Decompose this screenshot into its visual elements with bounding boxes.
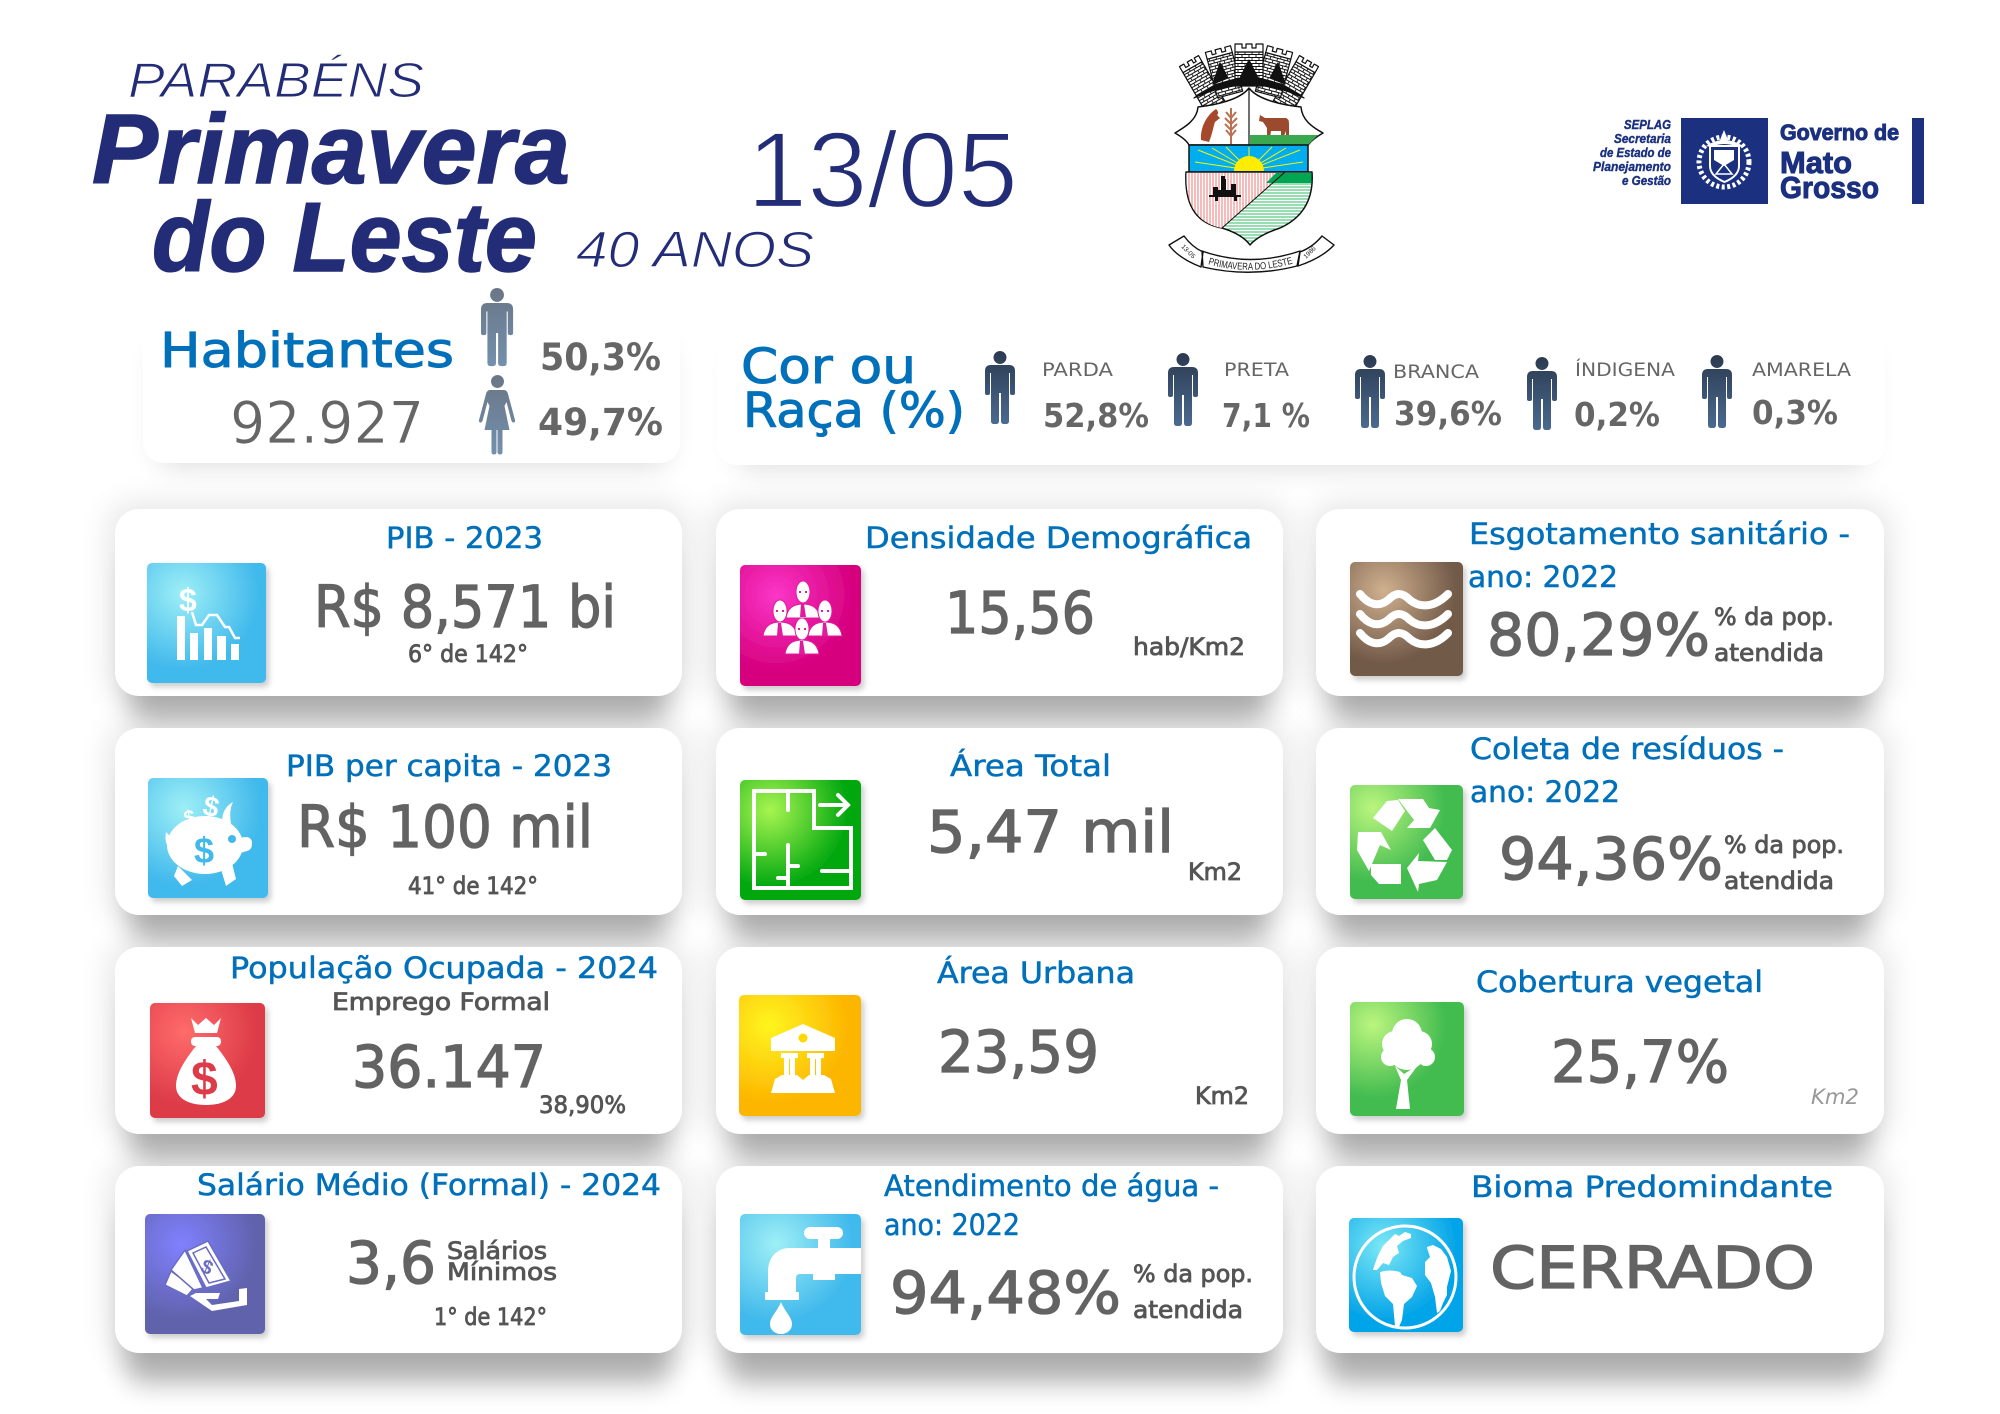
unit: atendida [1724, 867, 1834, 895]
panel: coleta de resíduos [1310, 722, 1890, 940]
icon: people [740, 565, 861, 686]
heading [884, 1169, 1219, 1242]
icon: chart: $ [179, 582, 197, 618]
group: indígena: ÍNDIGENA [1575, 358, 1675, 381]
date: 13/05 [747, 109, 1018, 230]
value: 15,56 [945, 579, 1095, 647]
logo: SEPLAG lines: SEPLAG [1624, 117, 1671, 132]
ribbon text [1207, 263, 1295, 270]
icon: piggy bank [148, 778, 268, 898]
panel: salário médio [109, 1160, 688, 1384]
ribbon tails and band [1169, 236, 1334, 272]
panel: população ocupada [109, 941, 688, 1159]
rank: 6° de 142° [408, 640, 528, 668]
icon: money bag [150, 1003, 265, 1118]
icon: piggy bank: $ [200, 790, 222, 824]
logo: SEPLAG lines: de Estado de [1600, 145, 1671, 160]
panel: PIB per capita [109, 722, 688, 940]
icon: municipal coat of arms: 1986 [1302, 245, 1318, 260]
heading: ano: 2022 [884, 1208, 1020, 1242]
panel: esgotamento sanitário [1310, 503, 1890, 721]
logo: wordmark [1780, 120, 1899, 205]
heading: Esgotamento sanitário - [1469, 517, 1850, 551]
logo: wordmark: Grosso [1780, 170, 1879, 205]
group: preta [1168, 353, 1310, 435]
heading: Salário Médio (Formal) - 2024 [197, 1168, 661, 1202]
unit: Km2 [1195, 1082, 1249, 1110]
title: do leste: do Leste [152, 182, 537, 292]
icon: chart [147, 563, 266, 683]
unit: Mínimos [447, 1258, 557, 1286]
group: branca: BRANCA [1393, 361, 1479, 383]
group: branca: 39,6% [1394, 394, 1502, 433]
value: CERRADO [1490, 1234, 1815, 1302]
panel: densidade demográfica [710, 503, 1289, 721]
crown towers [1179, 44, 1319, 116]
group: amarela: 0,3% [1752, 393, 1838, 432]
heading: Bioma Predomindante [1471, 1170, 1833, 1204]
group: indígena [1527, 357, 1675, 434]
heading: Densidade Demográfica [865, 521, 1252, 555]
icon: municipal coat of arms: 13-05 [1180, 243, 1197, 260]
panel: área urbana [710, 941, 1289, 1159]
heading: ano: 2022 [1468, 560, 1618, 594]
icon: piggy bank: $ [194, 830, 214, 871]
icon: waves [1350, 562, 1463, 676]
panel: área total [710, 722, 1289, 940]
grass [1250, 135, 1318, 145]
heading: habitantes: Habitantes [160, 323, 454, 379]
heading: cor ou raça [741, 339, 965, 439]
icon: tree [1350, 1002, 1464, 1116]
panel: cobertura vegetal [1310, 941, 1890, 1159]
unit: Km2 [1811, 1085, 1859, 1109]
unit: % da pop. [1133, 1260, 1253, 1288]
sub heading: Emprego Formal [332, 988, 550, 1016]
icon: piggy bank: $ [182, 806, 197, 830]
heading: População Ocupada - 2024 [230, 951, 658, 985]
group: amarela: AMARELA [1752, 359, 1851, 381]
unit [447, 1237, 557, 1286]
value: 23,59 [938, 1018, 1099, 1086]
unit: atendida [1714, 639, 1824, 667]
heading: Cobertura vegetal [1476, 965, 1763, 999]
icon: cash in hand: $ [197, 1256, 216, 1280]
panel: PIB 2023 [109, 503, 688, 721]
logo: SEPLAG lines: Planejamento [1593, 159, 1671, 174]
rank: 41° de 142° [408, 872, 538, 900]
icon: water tap [740, 1214, 861, 1335]
icon: globe [1349, 1218, 1463, 1332]
heading: Área Urbana [937, 956, 1135, 990]
icon: municipal coat of arms: PRIMAVERA DO LESTE [1208, 257, 1293, 270]
icon: cash in hand [145, 1214, 265, 1334]
icon: bank building [739, 995, 861, 1116]
group: parda [985, 351, 1149, 435]
heading: cor ou raça: Cor ou [741, 339, 916, 395]
logo: SEPLAG lines: Secretaria [1614, 131, 1671, 146]
group: branca [1355, 355, 1502, 433]
group: preta: 7,1 % [1222, 396, 1310, 435]
share: 38,90% [539, 1091, 626, 1119]
heading: Coleta de resíduos - [1470, 732, 1784, 766]
unit: Salários [447, 1237, 547, 1265]
heading: Atendimento de água - [884, 1169, 1219, 1203]
unit [1133, 1260, 1253, 1324]
logo: wordmark: Governo de [1780, 120, 1899, 145]
panel: habitantes [143, 288, 680, 468]
group: amarela [1702, 355, 1851, 432]
heading: PIB - 2023 [386, 521, 543, 555]
icon: man [481, 288, 513, 366]
title block [92, 54, 814, 292]
value: R$ 100 mil [297, 793, 593, 861]
panel: cor ou raça [717, 322, 1885, 470]
value: R$ 8,571 bi [314, 573, 616, 641]
unit: Km2 [1188, 858, 1242, 886]
heading [1468, 517, 1850, 594]
logo: SEPLAG lines [1593, 117, 1671, 188]
unit: % da pop. [1724, 831, 1844, 859]
unit: atendida [1133, 1296, 1243, 1324]
icon: recycle [1350, 785, 1463, 899]
group: parda: PARDA [1042, 359, 1113, 381]
heading: cor ou raça: Raça (%) [743, 383, 965, 439]
logo: vertical bar [1912, 118, 1924, 204]
shield upper [1175, 88, 1323, 145]
value: 94,36% [1499, 825, 1723, 893]
value: women share: 49,7% [538, 401, 663, 444]
value: men share: 50,3% [540, 336, 661, 379]
value: population: 92.927 [230, 389, 424, 457]
corn motif [1201, 109, 1220, 142]
icon: money bag: $ [191, 1053, 218, 1106]
value: 94,48% [890, 1259, 1121, 1327]
logo: Governo de Mato Grosso [1593, 117, 1924, 205]
logo: SEPLAG lines: e Gestão [1622, 173, 1671, 188]
subtitle: 40 anos: 40 ANOS [576, 221, 814, 278]
value: 80,29% [1487, 601, 1710, 669]
heading: PIB per capita - 2023 [286, 749, 612, 783]
title: primavera: Primavera [92, 94, 570, 204]
shield lower [1186, 172, 1312, 245]
rank: 1° de 142° [434, 1303, 547, 1331]
logo: blue square emblem [1681, 118, 1768, 204]
panel: atendimento de água [710, 1160, 1289, 1384]
icon: municipal coat of arms [1168, 43, 1335, 273]
blue band with sun [1189, 145, 1308, 172]
value: 3,6 [346, 1229, 436, 1297]
heading: ano: 2022 [1470, 775, 1620, 809]
value: 5,47 mil [927, 798, 1174, 866]
icon: floor plan [740, 780, 861, 900]
black figure in the shield [1209, 176, 1241, 201]
cow motif [1259, 115, 1289, 138]
panel: bioma [1310, 1160, 1890, 1384]
value: 36.147 [352, 1033, 546, 1101]
value: 25,7% [1551, 1028, 1729, 1096]
group: parda: 52,8% [1043, 396, 1149, 435]
logo: wordmark: Mato [1780, 145, 1852, 180]
title: parabéns: PARABÉNS [128, 54, 424, 108]
unit: hab/Km2 [1133, 633, 1245, 661]
icon: woman [479, 375, 515, 454]
group: preta: PRETA [1224, 359, 1289, 381]
unit: % da pop. [1714, 603, 1834, 631]
heading: Área Total [950, 749, 1111, 783]
heading [1470, 732, 1784, 809]
group: indígena: 0,2% [1574, 395, 1660, 434]
unit [1714, 603, 1834, 667]
unit [1724, 831, 1844, 895]
